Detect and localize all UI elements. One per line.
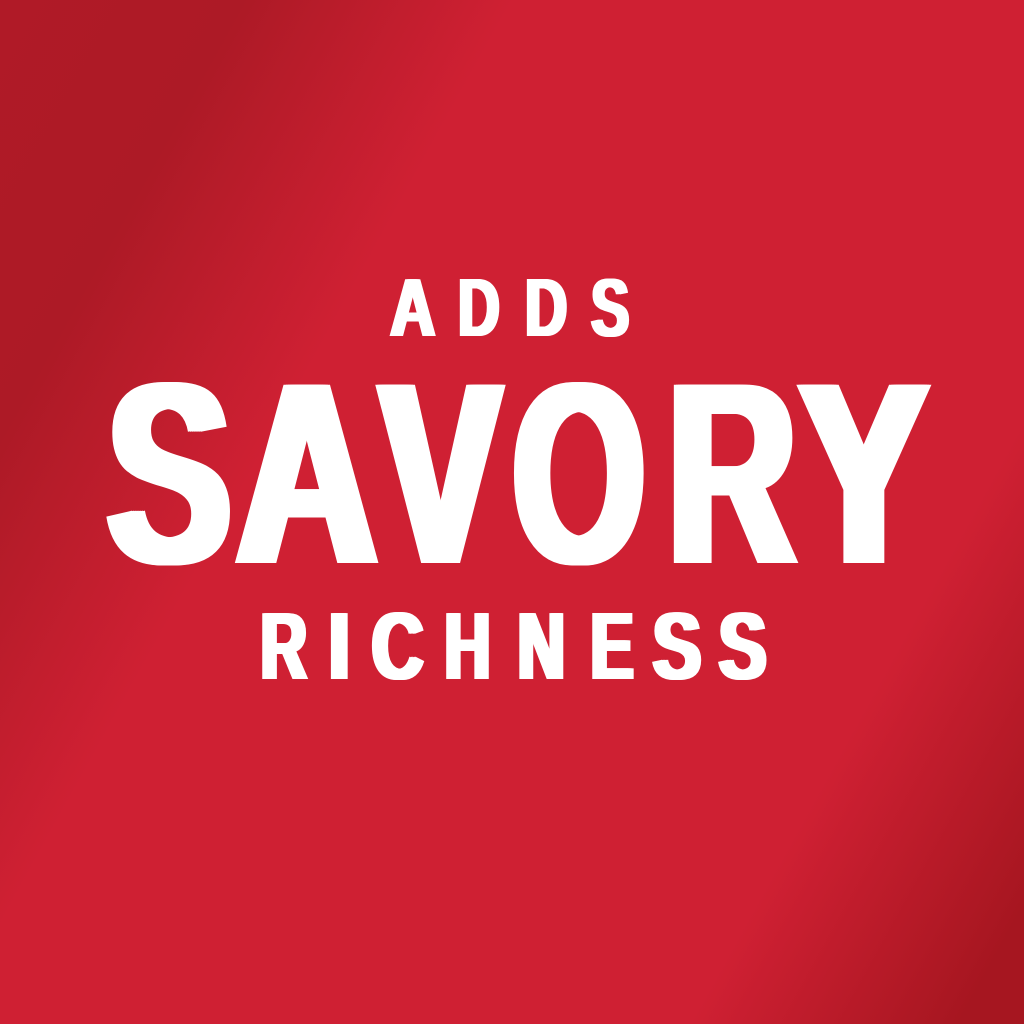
heading: ADDS: S <box>589 261 627 354</box>
heading: RICHNESS <box>258 593 766 700</box>
heading: SAVORY: O <box>507 329 639 618</box>
heading: SAVORY: R <box>662 329 790 618</box>
heading: RICHNESS: S <box>650 593 698 700</box>
heading: SAVORY: Y <box>793 329 921 618</box>
heading: RICHNESS: R <box>258 593 304 700</box>
heading: SAVORY: V <box>374 329 494 618</box>
heading: SAVORY: A <box>230 329 370 618</box>
heading: SAVORY <box>101 329 932 618</box>
heading: RICHNESS: E <box>588 593 631 700</box>
heading: RICHNESS: C <box>369 593 421 700</box>
heading: SAVORY: S <box>101 329 224 618</box>
heading: RICHNESS: N <box>515 593 562 700</box>
heading: ADDS: A <box>388 261 433 354</box>
heading: RICHNESS: S <box>716 593 764 700</box>
heading: ADDS <box>388 261 630 354</box>
heading: ADDS: D <box>523 261 565 354</box>
heading: RICHNESS: H <box>442 593 488 700</box>
heading: ADDS: D <box>456 261 497 354</box>
heading: RICHNESS: I <box>326 593 346 700</box>
